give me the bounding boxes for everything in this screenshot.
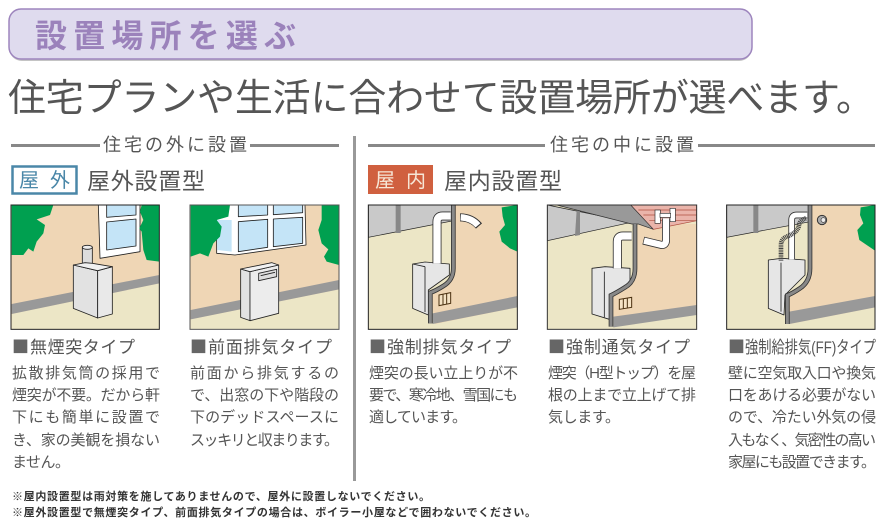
section header: inside: 住宅の中に設置	[550, 135, 694, 155]
column: chimney-free type: ■	[12, 333, 29, 358]
section header: outside	[11, 135, 339, 155]
banner	[9, 9, 752, 61]
column: forced exhaust type: ■	[369, 333, 386, 358]
column: chimney-free type	[12, 333, 160, 471]
column: front exhaust type: 前面から排気するの	[190, 365, 339, 382]
illustration: front exhaust boiler	[190, 205, 339, 329]
column: front exhaust type	[190, 333, 339, 449]
outdoor badge: 屋外	[19, 169, 70, 192]
column: forced ventilation type: 強制通気タイプ	[566, 338, 690, 357]
column: front exhaust type: 下のデッドスペースに	[190, 408, 339, 426]
column: forced exhaust type: 煙突の長い立上りが不	[369, 365, 518, 382]
column: forced exhaust type: 適しています。	[369, 409, 467, 426]
column: forced supply and exhaust FF type: 入もなく、気密性の高い	[728, 432, 876, 449]
column: forced exhaust type: 要で、寒冷地、雪国にも	[369, 387, 518, 404]
column: chimney-free type: 拡散排気筒の採用で	[12, 365, 160, 382]
column: forced supply and exhaust FF type	[728, 333, 876, 471]
column: front exhaust type: 前面排気タイプ	[208, 338, 332, 357]
column: forced ventilation type: 煙突（H型トップ）を屋	[548, 365, 696, 382]
banner: 設置場所を選ぶ	[35, 18, 296, 54]
column: forced ventilation type: ■	[548, 333, 565, 358]
column: forced supply and exhaust FF type: ■	[728, 333, 745, 358]
column: forced supply and exhaust FF type: 壁に空気取入口や換気	[728, 365, 876, 382]
footnotes: ※屋外設置型で無煙突タイプ、前面排気タイプの場合は、ボイラー小屋などで囲わないでください。	[12, 505, 536, 519]
illustration: forced ventilation boiler with H-top	[547, 205, 697, 329]
indoor badge: 屋内	[375, 169, 426, 192]
column: forced supply and exhaust FF type: 家屋にも設置できます。	[728, 454, 876, 471]
outdoor badge	[12, 166, 76, 194]
outdoor type label: 屋外設置型	[87, 168, 205, 194]
column: forced ventilation type	[548, 333, 696, 426]
column: forced supply and exhaust FF type: ので、冷たい外気の侵	[728, 409, 876, 426]
section header: outside: 住宅の外に設置	[103, 135, 247, 155]
column: forced supply and exhaust FF type: 口をあける必要がない	[728, 387, 876, 404]
column: chimney-free type: 下にも簡単に設置で	[12, 408, 160, 426]
column: chimney-free type: ません。	[12, 454, 70, 471]
column: forced exhaust type: 強制排気タイプ	[387, 338, 511, 357]
vertical divider	[353, 136, 356, 481]
column: front exhaust type: で、出窓の下や階段の	[190, 387, 339, 404]
illustration: chimney-free boiler	[11, 205, 159, 329]
column: forced ventilation type: 根の上まで立上げて排	[548, 387, 696, 404]
column: chimney-free type: 無煙突タイプ	[30, 338, 135, 357]
column: front exhaust type: スッキリと収まります。	[190, 432, 339, 449]
headline: 住宅プランや生活に合わせて設置場所が選べます。	[8, 78, 874, 120]
illustration: forced exhaust boiler	[368, 205, 517, 329]
column: forced exhaust type	[369, 333, 518, 426]
column: forced ventilation type: 気します。	[548, 409, 620, 426]
illustration: forced supply and exhaust FF boiler	[727, 205, 875, 329]
footnotes	[12, 489, 536, 519]
column: front exhaust type: ■	[190, 333, 207, 358]
indoor type label: 屋内設置型	[444, 168, 562, 194]
section header: inside	[368, 135, 875, 155]
indoor badge	[368, 165, 433, 194]
footnotes: ※屋内設置型は雨対策を施してありませんので、屋外に設置しないでください。	[12, 489, 430, 503]
column: chimney-free type: 煙突が不要。だから軒	[12, 387, 160, 404]
column: chimney-free type: き、家の美観を損ない	[12, 432, 160, 449]
